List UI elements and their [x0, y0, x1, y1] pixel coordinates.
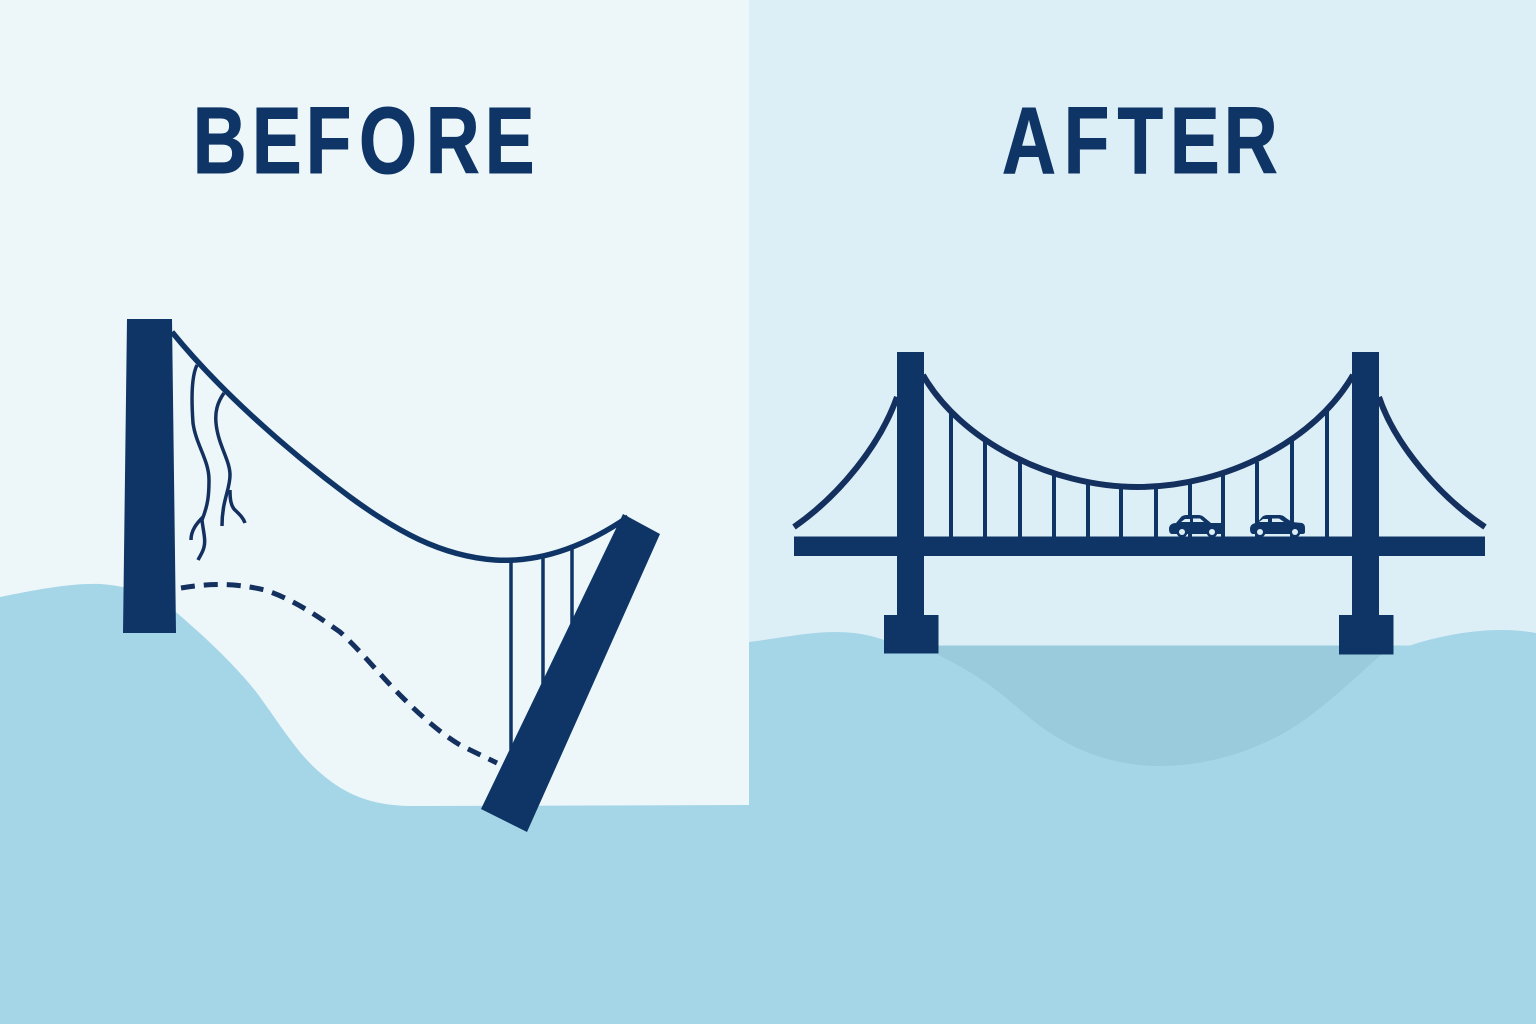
dashed former deck [181, 584, 497, 763]
vertical suspenders [951, 410, 1327, 538]
tilted right tower [481, 514, 660, 832]
panel: after background [749, 0, 1536, 806]
illustration: restored bridge [794, 352, 1485, 654]
left side cable [794, 397, 897, 527]
illustration: collapsed bridge [123, 319, 660, 832]
left tower [123, 319, 176, 633]
car 1 [1169, 515, 1223, 538]
water: full lower area [0, 584, 1536, 1024]
main cable [923, 375, 1353, 487]
remaining vertical suspenders [511, 546, 572, 750]
panel: before background [0, 0, 749, 806]
road deck [794, 536, 1485, 556]
right tower [1352, 352, 1379, 616]
car 2 [1250, 515, 1305, 538]
water: shaded area under after bridge [938, 646, 1392, 766]
right side cable [1379, 397, 1485, 527]
right pier [1339, 615, 1394, 654]
main cable sagging [172, 332, 628, 560]
left tower [897, 352, 924, 616]
left pier [884, 615, 938, 654]
heading: after: AFTER [1002, 89, 1278, 194]
heading: before: BEFORE [193, 89, 535, 194]
broken hanging cables [191, 365, 245, 560]
